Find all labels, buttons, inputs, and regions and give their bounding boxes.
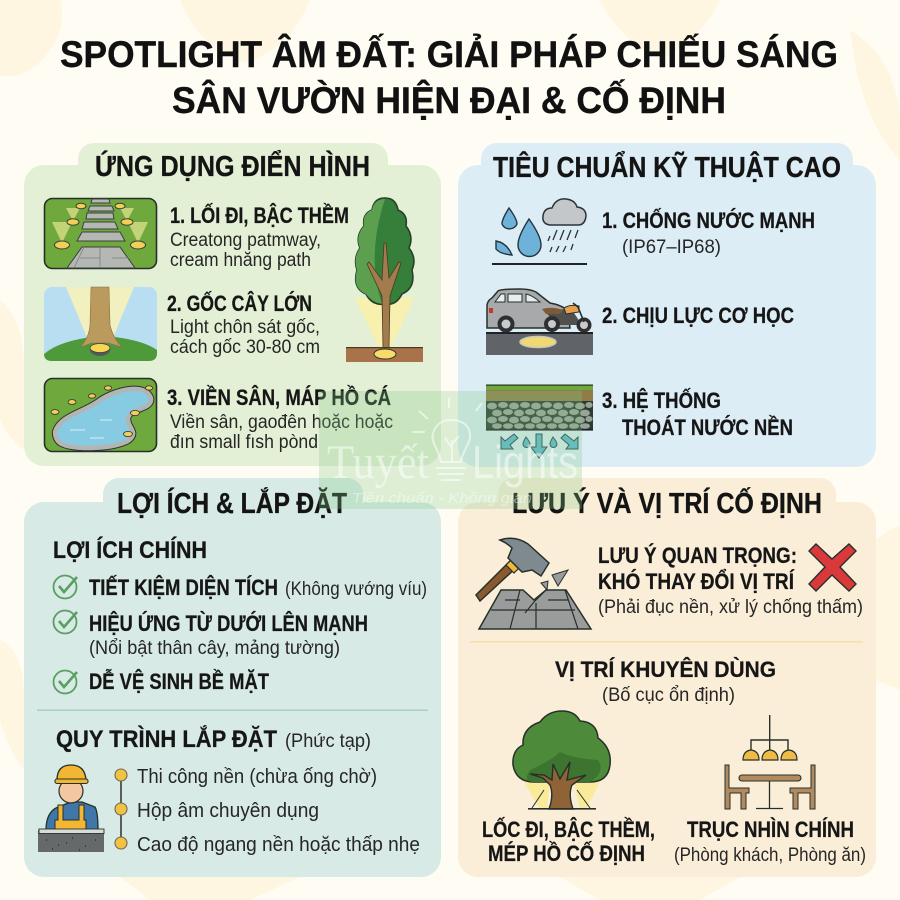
timeline: installation steps: Cao độ ngang nền hoặc thấp nhẹ bbox=[137, 833, 420, 856]
text: lối đi bbox=[170, 202, 349, 271]
benefit: dễ vệ sinh bbox=[54, 668, 269, 694]
heading: vị trí khuyên dùng: VỊ TRÍ KHUYÊN DÙNG bbox=[555, 657, 776, 682]
heading: vị trí khuyên dùng: (Bố cục ổn định) bbox=[602, 685, 735, 706]
icon: pendant lamp and dining table bbox=[725, 715, 815, 809]
text: gốc cây: 2. GỐC CÂY LỚN bbox=[167, 290, 312, 316]
heading: lưu ý: LƯU Ý VÀ VỊ TRÍ CỐ ĐỊNH bbox=[512, 486, 822, 520]
text: lưu ý quan trọng: (Phải đục nền, xử lý chống thấm) bbox=[598, 597, 863, 618]
icon: pond bbox=[44, 378, 156, 452]
icon: drainage layers bbox=[486, 384, 593, 458]
text: lưu ý quan trọng: LƯU Ý QUAN TRỌNG: bbox=[598, 543, 797, 568]
text: viền sân bbox=[167, 385, 393, 453]
watermark: Tuyết Lights bbox=[319, 391, 582, 509]
heading: lợi ích và lắp đặt: LỢI ÍCH & LẮP ĐẶT bbox=[117, 486, 347, 520]
timeline: installation steps: Thi công nền (chừa ống chờ) bbox=[137, 765, 377, 788]
icon: car and motorbike on road bbox=[486, 289, 593, 355]
benefit: tiết kiệm diện tích: (Không vướng víu) bbox=[285, 579, 427, 600]
text: chịu lực: 2. CHỊU LỰC CƠ HỌC bbox=[602, 303, 794, 328]
panel: lợi ích và lắp đặt bbox=[24, 478, 441, 877]
watermark: Tuyết Lights: Lights bbox=[472, 436, 578, 488]
benefit: hiệu ứng từ dưới lên bbox=[54, 610, 368, 659]
title: SPOTLIGHT ÂM ĐẤT: GIẢI PHÁP CHIẾU SÁNG bbox=[60, 33, 838, 75]
panel: ứng dụng điển hình bbox=[24, 143, 441, 466]
title: SÂN VƯỜN HIỆN ĐẠI & CỐ ĐỊNH bbox=[172, 79, 726, 121]
heading: tiêu chuẩn: TIÊU CHUẨN KỸ THUẬT CAO bbox=[493, 150, 841, 184]
benefit: tiết kiệm diện tích bbox=[54, 575, 427, 600]
benefit: dễ vệ sinh: DỄ VỆ SINH BỀ MẶT bbox=[89, 668, 269, 694]
heading: vị trí khuyên dùng bbox=[555, 657, 776, 706]
text: lưu ý quan trọng: KHÓ THAY ĐỔI VỊ TRÍ bbox=[598, 569, 795, 594]
watermark: Tuyết Lights: Tuyết bbox=[327, 436, 430, 489]
text: chống nước: (IP67–IP68) bbox=[622, 237, 721, 258]
label: lối đi bậc thềm mép hồ: LỐC ĐI, BẬC THỀM, bbox=[482, 816, 655, 842]
text: hệ thống thoát nước: THOÁT NƯỚC NỀN bbox=[622, 415, 793, 440]
subheading: quy trình lắp đặt: QUY TRÌNH LẮP ĐẶT bbox=[56, 725, 277, 753]
text: gốc cây: Light chôn sát gốc, bbox=[170, 317, 320, 338]
watermark: Tuyết Lights: Tiên chuẩn - Không gian bbox=[352, 490, 532, 507]
text: lối đi: 1. LỐI ĐI, BẬC THỀM bbox=[170, 202, 349, 228]
label: trục nhìn chính: (Phòng khách, Phòng ăn) bbox=[674, 845, 866, 866]
subheading: lợi ích chính: LỢI ÍCH CHÍNH bbox=[53, 536, 207, 564]
text: chống nước bbox=[602, 207, 815, 258]
benefit: hiệu ứng từ dưới lên: HIỆU ỨNG TỪ DƯỚI LÊN MẠNH bbox=[89, 611, 368, 636]
label: trục nhìn chính bbox=[674, 817, 866, 866]
icon: water drops and cloud bbox=[492, 199, 587, 265]
benefit: tiết kiệm diện tích: TIẾT KIỆM DIỆN TÍCH bbox=[89, 575, 278, 600]
text: lưu ý quan trọng bbox=[598, 543, 863, 618]
label: lối đi bậc thềm mép hồ: MÉP HỒ CỐ ĐỊNH bbox=[488, 840, 645, 866]
text: hệ thống thoát nước: 3. HỆ THỐNG bbox=[602, 387, 721, 413]
timeline: installation steps bbox=[115, 765, 420, 856]
icon: shade tree bbox=[513, 711, 610, 810]
label: trục nhìn chính: TRỤC NHÌN CHÍNH bbox=[687, 817, 854, 842]
subheading: quy trình lắp đặt: (Phức tạp) bbox=[285, 731, 371, 752]
text: gốc cây bbox=[167, 290, 320, 358]
panel: lưu ý và vị trí cố định bbox=[458, 478, 876, 877]
icon: tree base bbox=[44, 287, 157, 361]
icon: red cross bbox=[809, 544, 856, 591]
text: lối đi: Creatong patmway, bbox=[170, 230, 321, 251]
text: viền sân: Viền sân, gaođên hoặc hoặc bbox=[170, 412, 393, 433]
title bbox=[60, 33, 838, 121]
text: chống nước: 1. CHỐNG NƯỚC MẠNH bbox=[602, 207, 815, 233]
timeline: installation steps: Hộp âm chuyên dụng bbox=[137, 799, 319, 822]
text: viền sân: 3. VIỀN SÂN, MÁP HỒ CÁ bbox=[167, 385, 391, 410]
benefit: hiệu ứng từ dưới lên: (Nổi bật thân cây, mảng tường) bbox=[89, 638, 340, 659]
label: lối đi bậc thềm mép hồ bbox=[482, 816, 655, 866]
icon: tall tree bbox=[346, 198, 423, 362]
icon: hammer and broken tiles bbox=[476, 538, 591, 629]
heading: ứng dụng: ỨNG DỤNG ĐIỂN HÌNH bbox=[95, 149, 370, 183]
text: viền sân: đın small fısh pònd bbox=[170, 432, 318, 453]
text: gốc cây: cách gốc 30-80 cm bbox=[170, 337, 320, 358]
panel: tiêu chuẩn kỹ thuật bbox=[458, 143, 876, 467]
icon: garden path bbox=[44, 198, 156, 268]
icon: worker bbox=[38, 765, 104, 852]
text: lối đi: cream hnăng path bbox=[170, 250, 311, 271]
text: hệ thống thoát nước bbox=[602, 387, 793, 440]
